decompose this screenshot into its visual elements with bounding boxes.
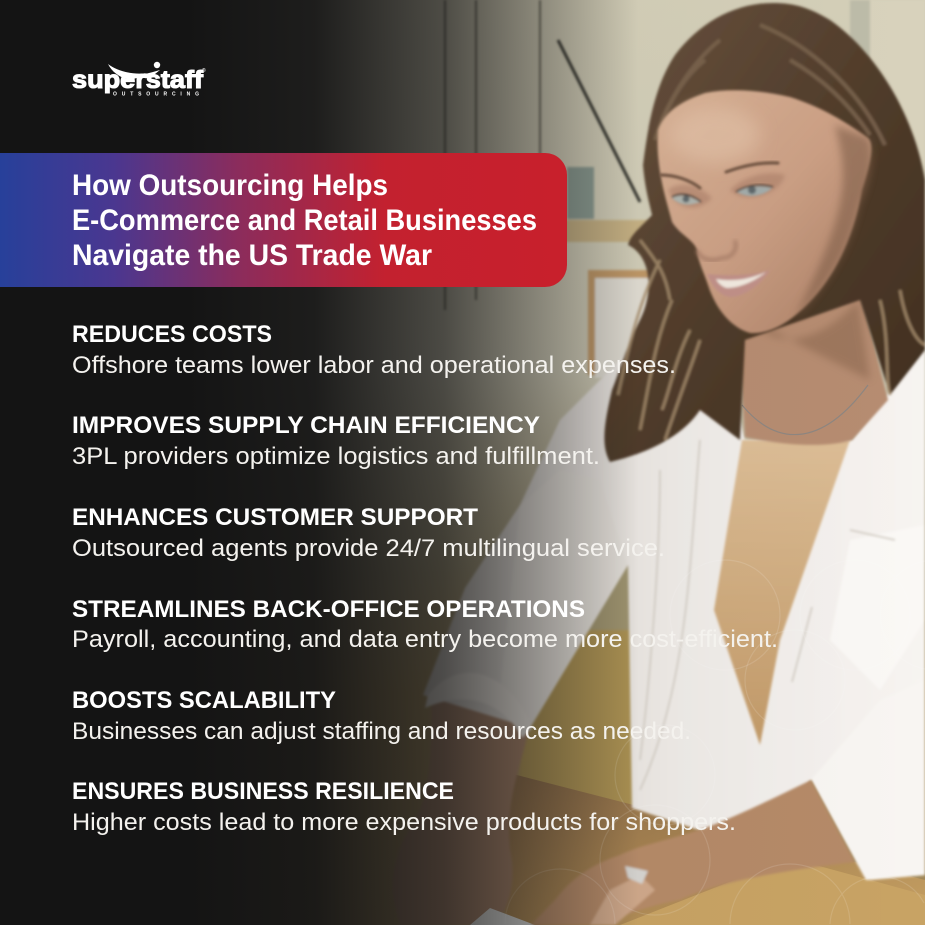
- title banner: [0, 153, 567, 287]
- keyboard: [470, 908, 535, 925]
- item: boosts scalability: Businesses can adjust staffing and resources as needed.: [72, 718, 691, 745]
- nose: [697, 240, 736, 260]
- left forearm and hand: [505, 736, 526, 906]
- title: Navigate the US Trade War: [72, 239, 432, 272]
- item: improves supply chain efficiency: [72, 412, 600, 470]
- decorative circle pattern: [505, 560, 925, 924]
- item: boosts scalability: BOOSTS SCALABILITY: [72, 687, 336, 714]
- item: streamlines back-office operations: Payroll, accounting, and data entry become more cost-efficient.: [72, 626, 778, 653]
- shirt: [423, 340, 925, 880]
- item: reduces costs: Offshore teams lower labor and operational expenses.: [72, 352, 676, 379]
- item: enhances customer support: ENHANCES CUSTOMER SUPPORT: [72, 504, 478, 531]
- tank top: [714, 440, 850, 745]
- face: [658, 90, 872, 333]
- logo: superstaff outsourcing: ®: [202, 67, 206, 74]
- eyes: [672, 185, 773, 205]
- background photo: woman at a desk: [294, 0, 925, 925]
- face highlight: [670, 107, 760, 163]
- eye socket shade: [668, 173, 785, 208]
- item: streamlines back-office operations: STREAMLINES BACK-OFFICE OPERATIONS: [72, 596, 585, 623]
- item: reduces costs: [72, 321, 676, 379]
- hair back: [604, 3, 925, 462]
- face shadow: [795, 125, 872, 318]
- item: streamlines back-office operations: [72, 596, 778, 653]
- title: [72, 169, 537, 272]
- logo: superstaff outsourcing: OUTSOURCING: [113, 92, 199, 98]
- item: improves supply chain efficiency: 3PL providers optimize logistics and fulfillment.: [72, 443, 600, 470]
- desk: [505, 772, 925, 925]
- mouth: [708, 271, 768, 296]
- item: boosts scalability: [72, 687, 691, 745]
- shirt creases and buttons: [640, 440, 895, 790]
- title: E-Commerce and Retail Businesses: [72, 204, 537, 237]
- item: ensures business resilience: ENSURES BUSINESS RESILIENCE: [72, 778, 454, 805]
- eyebrows: [661, 163, 778, 188]
- item: reduces costs: REDUCES COSTS: [72, 321, 272, 348]
- item: enhances customer support: Outsourced agents provide 24/7 multilingual service.: [72, 535, 665, 562]
- logo: superstaff outsourcing: superstaff: [72, 66, 204, 94]
- right forearm and hand: [530, 780, 855, 925]
- item: improves supply chain efficiency: IMPROVES SUPPLY CHAIN EFFICIENCY: [72, 412, 540, 439]
- title: How Outsourcing Helps: [72, 169, 388, 202]
- neck: [738, 290, 888, 445]
- item: enhances customer support: [72, 504, 665, 562]
- item: ensures business resilience: [72, 778, 736, 836]
- item: ensures business resilience: Higher costs lead to more expensive products for shoppers.: [72, 809, 736, 836]
- room background and shelves: [443, 0, 870, 804]
